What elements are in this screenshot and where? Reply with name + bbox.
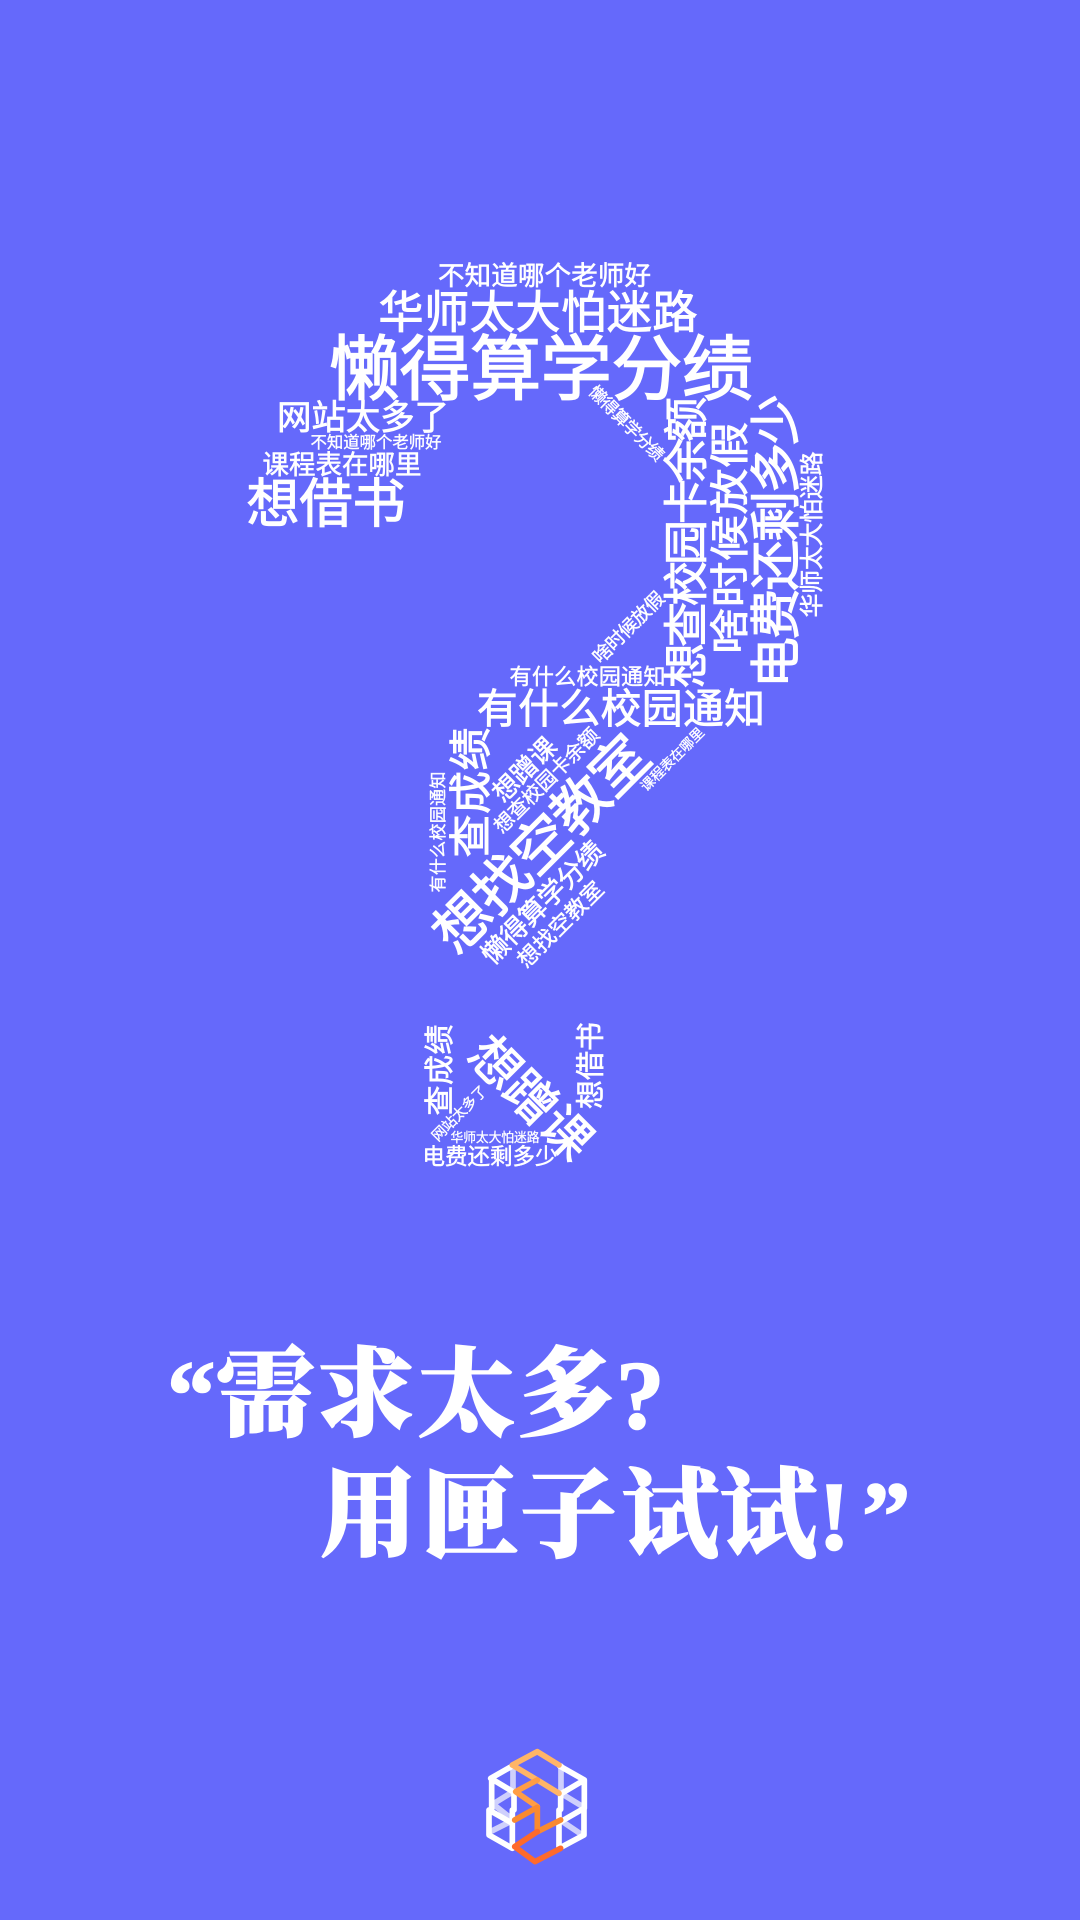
word: largest: 懒得算学分绩 — [329, 331, 753, 410]
word: top arc small: 不知道哪个老师好 — [438, 261, 651, 291]
headline line 1: “需求太多? — [167, 1342, 664, 1449]
word: notice large: 有什么校园通知 — [477, 686, 765, 732]
word: right vertical electricity: 电费还剩多少 — [748, 394, 805, 688]
word: notice vertical small: 有什么校园通知 — [429, 772, 448, 892]
logo mid orange fold — [516, 1780, 537, 1807]
word: dot electricity: 电费还剩多少 — [422, 1145, 558, 1170]
word: card balance diagonal: 想查校园卡余额 — [490, 724, 604, 838]
logo: hexagonal cube — [489, 1752, 584, 1862]
word: classroom diagonal small: 想找空教室 — [513, 877, 609, 973]
word: grades diagonal: 懒得算学分绩 — [476, 836, 610, 970]
word: find empty classroom: 想找空教室 — [421, 724, 662, 965]
logo translucent inner lines — [492, 1766, 584, 1835]
word: left hook small: 不知道哪个老师好 — [310, 434, 442, 452]
word: dot too many sites: 网站太多了 — [429, 1083, 491, 1145]
word: check grades vertical: 查成绩 — [448, 728, 496, 858]
word: dot audit class: 想蹭课 — [458, 1026, 603, 1171]
headline — [167, 1342, 910, 1570]
word: dot check grades: 查成绩 — [424, 1024, 457, 1116]
headline line 2: 用匣子试试!” — [320, 1463, 910, 1570]
word: dot campus small: 华师太大怕迷路 — [450, 1130, 540, 1145]
word: notice small: 有什么校园通知 — [510, 664, 666, 689]
word: right vertical small: 华师太大怕迷路 — [799, 452, 826, 618]
word: left hook timetable: 课程表在哪里 — [262, 450, 422, 480]
word: diagonal inner right: 懒得算学分绩 — [585, 382, 668, 465]
word: timetable diagonal: 课程表在哪里 — [637, 724, 707, 794]
logo light orange top — [512, 1752, 559, 1793]
logo deep orange base — [515, 1832, 561, 1862]
question mark word cloud — [246, 261, 826, 1171]
word: top arc: 华师太大怕迷路 — [378, 287, 698, 338]
dot of question mark — [422, 1022, 608, 1171]
word: right vertical card balance: 想查校园卡余额 — [661, 397, 712, 688]
word: right vertical holiday: 啥时候放假 — [709, 422, 753, 654]
logo orange spine — [515, 1807, 561, 1832]
word: borrow book: 想借书 — [246, 475, 406, 534]
logo white frame — [489, 1766, 584, 1848]
word: dot borrow book: 想借书 — [575, 1022, 608, 1109]
word: left hook: 网站太多了 — [277, 400, 449, 438]
word: audit class: 想蹭课 — [486, 731, 563, 808]
word: diagonal holiday small: 啥时候放假 — [589, 588, 669, 668]
